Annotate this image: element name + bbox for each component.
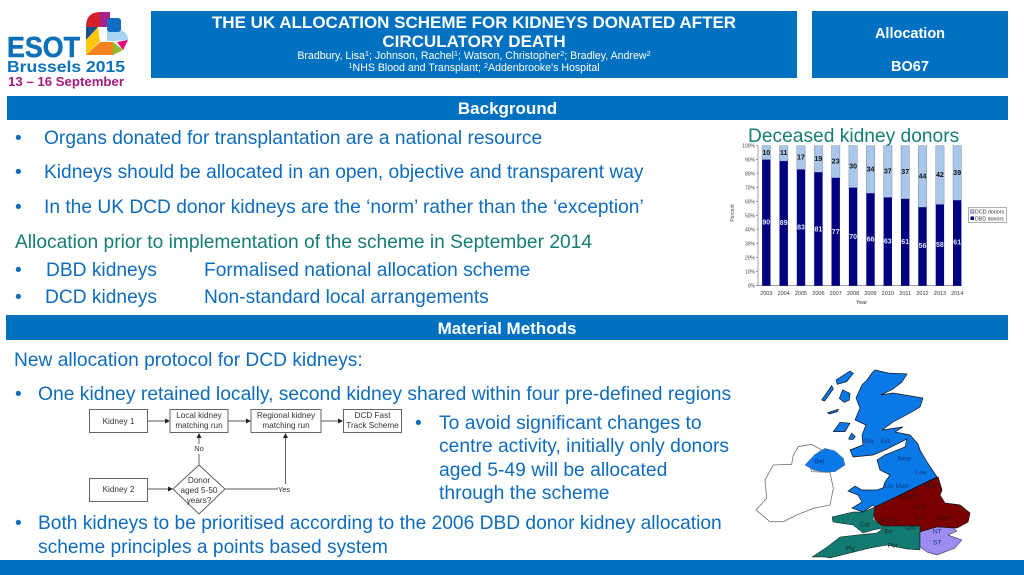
stacked bar chart: 39 <box>953 170 961 177</box>
flowchart: No <box>194 444 204 453</box>
legend <box>968 208 1006 222</box>
stacked bar chart: 56 <box>919 243 926 250</box>
city labels: Lee <box>915 469 927 476</box>
stacked bar chart: 2005 <box>795 291 807 297</box>
heading: Material Methods: Material Methods <box>438 319 576 338</box>
stacked bar chart: 61 <box>953 240 961 246</box>
stacked bar chart: 2013 <box>934 291 946 297</box>
panel: category and poster code: Allocation <box>875 26 945 42</box>
stacked bar chart: 2007 <box>830 291 842 297</box>
city labels: Bri <box>884 528 893 535</box>
stacked bar chart: 77 <box>832 229 840 236</box>
methods bullet 2: • <box>15 513 22 534</box>
stacked bar chart: 90% <box>745 158 756 164</box>
city labels: W <box>879 517 886 524</box>
title: CIRCULATORY DEATH <box>382 32 566 50</box>
subheading: prior allocation: Allocation prior to implementation of the scheme in September 2014 <box>15 232 592 253</box>
city labels: Lic <box>916 515 925 522</box>
prior allocation list: • <box>15 260 22 281</box>
side note: through the scheme <box>439 483 609 504</box>
methods bullet 1: One kidney retained locally, second kidney shared within four pre-defined regions <box>38 384 731 405</box>
flowchart: aged 5-50 <box>181 486 218 495</box>
flowchart: matching run <box>175 421 223 430</box>
city labels: Bel <box>815 459 825 466</box>
stacked bar chart: 23 <box>832 158 840 166</box>
background bullets <box>15 128 644 218</box>
stacked bar chart: 30 <box>849 164 857 170</box>
stacked bar chart: 50% <box>745 214 756 220</box>
DBD bars <box>762 160 961 286</box>
stacked bar chart: 2010 <box>882 291 894 297</box>
stacked bar chart: 2012 <box>916 291 929 297</box>
side note: centre activity, initially only donors <box>439 436 729 457</box>
DCD bars <box>762 146 961 207</box>
heading: Material Methods <box>6 315 1008 340</box>
methods bullet 2: Both kidneys to be prioritised according to the 2006 DBD donor kidney allocation <box>38 513 722 534</box>
flowchart: Kidney 1 <box>103 417 135 426</box>
prior allocation list: Formalised national allocation scheme <box>204 260 530 281</box>
city labels: Not <box>915 504 926 511</box>
city labels: Liv <box>884 483 894 490</box>
stacked bar chart: Percent <box>730 204 736 222</box>
side note: • <box>415 413 422 434</box>
title <box>212 13 736 50</box>
flowchart: Regional kidney <box>257 411 316 420</box>
stacked bar chart: 61 <box>901 239 909 246</box>
panel: category and poster code <box>812 11 1008 78</box>
city labels: Hull <box>925 483 937 490</box>
flowchart: Kidney 2 <box>103 485 135 494</box>
flowchart: Local kidney <box>176 411 223 420</box>
flowchart: years? <box>187 496 212 505</box>
stacked bar chart: Year <box>856 300 867 306</box>
stacked bar chart: 2003 <box>760 291 772 297</box>
methods bullet 2: scheme principles a points based system <box>38 537 388 558</box>
city labels: Ply <box>846 546 856 553</box>
stacked bar chart: 100% <box>742 144 756 150</box>
stacked bar chart <box>730 144 1007 306</box>
stacked bar chart: 2009 <box>864 291 877 297</box>
city labels: New <box>898 455 911 462</box>
stacked bar chart: 17 <box>797 154 805 162</box>
heading: Background: Background <box>458 99 557 118</box>
authors <box>297 49 651 74</box>
UK map with allocation regions <box>756 370 970 558</box>
city labels <box>815 438 951 553</box>
stacked bar chart: 11 <box>780 150 788 157</box>
stacked bar chart: 44 <box>919 174 926 180</box>
city labels: Car <box>860 522 871 529</box>
logo: ESOT Brussels 2015: Brussels 2015 <box>7 59 125 76</box>
region: south east <box>920 527 962 555</box>
side note: To avoid significant changes to <box>439 413 702 434</box>
legend: DCD donors <box>975 210 1004 216</box>
prior allocation list: DBD kidneys <box>46 260 157 281</box>
authors: Bradbury, Lisa1; Johnson, Rachel1; Watson, Christopher2; Bradley, Andrew2 <box>297 49 651 62</box>
footer bar <box>0 560 1024 575</box>
region: south west <box>812 507 920 558</box>
city labels: Cov <box>886 517 899 524</box>
city labels: Cam <box>936 515 951 522</box>
heading: Background <box>7 96 1008 120</box>
region: north <box>848 370 937 512</box>
stacked bar chart: 40% <box>745 228 756 234</box>
stacked bar chart: 2004 <box>778 291 790 297</box>
legend: DBD donors <box>975 216 1004 222</box>
background bullets: • <box>15 162 22 183</box>
city labels: Oxf <box>905 525 916 532</box>
stacked bar chart: 10 <box>762 150 770 157</box>
Northern Ireland <box>805 448 845 472</box>
stacked bar chart: 37 <box>901 169 909 176</box>
title: THE UK ALLOCATION SCHEME FOR KIDNEYS DONATED AFTER <box>212 13 736 32</box>
stacked bar chart: 2006 <box>812 291 825 297</box>
background bullets: Organs donated for transplantation are a national resource <box>44 128 542 149</box>
flowchart: Donor <box>188 476 210 485</box>
city labels: NT <box>933 528 942 535</box>
methods bullet 1: • <box>15 384 22 405</box>
prior allocation list <box>15 260 530 308</box>
icon: heart logo <box>86 12 128 55</box>
city labels: Sheff <box>901 493 916 500</box>
stacked bar chart: 90 <box>762 220 770 226</box>
prior allocation list: DCD kidneys <box>45 287 157 308</box>
stacked bar chart: 80% <box>745 172 756 178</box>
methods intro: New allocation protocol for DCD kidneys: <box>14 350 363 371</box>
background bullets: • <box>15 128 22 149</box>
flowchart <box>89 409 402 514</box>
stacked bar chart: 34 <box>867 166 874 174</box>
flowchart: Yes <box>278 485 290 494</box>
city labels: ST <box>933 539 942 546</box>
prior allocation list: • <box>15 287 22 308</box>
stacked bar chart: 70% <box>745 186 756 192</box>
stacked bar chart: 2011 <box>899 291 911 297</box>
stacked bar chart: 66 <box>867 236 874 244</box>
Ireland <box>756 444 833 522</box>
flowchart: matching run <box>262 421 310 430</box>
methods bullet 2 <box>15 513 722 558</box>
stacked bar chart: 89 <box>780 220 788 227</box>
flowchart: Track Scheme <box>346 421 399 430</box>
stacked bar chart: 58 <box>936 242 944 249</box>
title panel <box>151 11 797 78</box>
chart title: Deceased kidney donors <box>748 126 959 147</box>
city labels: Edi <box>881 438 891 445</box>
stacked bar chart: 2008 <box>847 291 859 297</box>
flowchart: DCD Fast <box>355 411 391 420</box>
stacked bar chart: 30% <box>745 242 756 248</box>
stacked bar chart: 83 <box>797 224 805 232</box>
side note: aged 5-49 will be allocated <box>439 460 667 481</box>
panel: category and poster code: BO67 <box>891 59 929 75</box>
stacked bar chart: 10% <box>745 270 756 276</box>
stacked bar chart: 60% <box>745 200 756 206</box>
authors: 1NHS Blood and Transplant; 2Addenbrooke's Hospital <box>348 61 600 74</box>
stacked bar chart: 2014 <box>951 291 963 297</box>
side note <box>415 413 729 504</box>
city labels: Man <box>896 483 909 490</box>
stacked bar chart: 20% <box>745 256 756 262</box>
stacked bar chart: 0% <box>748 284 756 290</box>
stacked bar chart: 63 <box>884 238 892 246</box>
background bullets: • <box>15 197 22 218</box>
stacked bar chart: 42 <box>936 172 944 179</box>
stacked bar chart: 81 <box>815 226 822 234</box>
stacked bar chart: 19 <box>815 156 822 163</box>
background bullets: Kidneys should be allocated in an open, objective and transparent way <box>44 162 643 183</box>
stacked bar chart: 70 <box>849 234 857 241</box>
stacked bar chart: 37 <box>884 168 892 176</box>
logo: ESOT Brussels 2015: 13 – 16 September <box>8 75 124 89</box>
prior allocation list: Non-standard local arrangements <box>204 287 489 308</box>
background bullets: In the UK DCD donor kidneys are the ‘norm’ rather than the ‘exception’ <box>44 197 644 218</box>
city labels: Gla <box>863 438 874 445</box>
logo: ESOT Brussels 2015 <box>7 12 128 89</box>
region: east <box>873 477 970 532</box>
Scottish islands <box>822 371 855 440</box>
logo: ESOT Brussels 2015: ESOT <box>7 32 80 64</box>
city labels: Por <box>887 542 899 549</box>
